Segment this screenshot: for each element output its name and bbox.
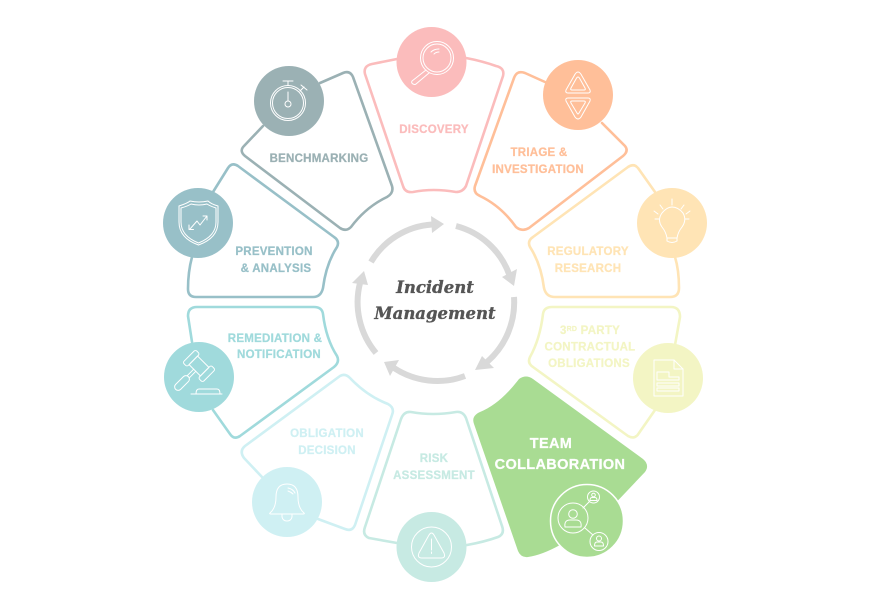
label: third party contractual obligations: CONTRACTUAL xyxy=(545,342,635,354)
label: risk assessment: ASSESSMENT xyxy=(393,470,475,482)
label: benchmarking: BENCHMARKING xyxy=(270,153,368,165)
label: third party contractual obligations: 3 xyxy=(560,325,567,337)
label: triage and investigation: INVESTIGATION xyxy=(492,164,584,176)
label: risk assessment: RISK xyxy=(420,453,449,465)
label: team collaboration: TEAM xyxy=(530,436,572,452)
label: obligation decision: DECISION xyxy=(298,445,356,457)
label: remediation and notification: REMEDIATION & xyxy=(228,333,322,345)
panel: triage and investigation xyxy=(475,60,627,230)
icon: shield with chart xyxy=(163,188,233,258)
icon: warning triangle xyxy=(396,512,466,582)
icon: light bulb xyxy=(637,188,707,258)
label: triage and investigation: TRIAGE & xyxy=(511,147,567,159)
icon: gavel xyxy=(164,342,234,412)
label: team collaboration: COLLABORATION xyxy=(495,457,625,473)
icon: triage triangles xyxy=(543,60,613,130)
label: remediation and notification: NOTIFICATION xyxy=(237,349,321,361)
icon: connected people xyxy=(550,484,624,558)
center title: Management xyxy=(373,304,496,323)
label: regulatory research: REGULATORY xyxy=(547,246,629,258)
panel: obligation decision xyxy=(242,375,393,537)
icon: document xyxy=(633,343,703,413)
panel: regulatory research xyxy=(529,165,707,297)
label: prevention and analysis: PREVENTION xyxy=(235,246,313,258)
icon: stopwatch xyxy=(254,66,324,136)
label: regulatory research: RESEARCH xyxy=(555,263,621,275)
center title: Incident xyxy=(395,278,474,297)
label: third party contractual obligations: RD xyxy=(567,326,577,333)
panel: risk assessment xyxy=(364,412,503,582)
panel: third party contractual obligations xyxy=(529,307,703,437)
label: third party contractual obligations: OBLIGATIONS xyxy=(548,358,630,370)
panel: remediation and notification xyxy=(164,307,338,438)
label: prevention and analysis: & ANALYSIS xyxy=(241,263,311,275)
center cycle arrows xyxy=(352,216,517,381)
panel: prevention and analysis xyxy=(163,164,338,297)
panel: team collaboration (highlighted) xyxy=(473,376,647,558)
icon: bell xyxy=(252,467,322,537)
label: third party contractual obligations: PARTY xyxy=(577,325,620,337)
icon: discovery magnifier xyxy=(396,27,466,97)
panel: benchmarking xyxy=(242,66,392,230)
label: obligation decision: OBLIGATION xyxy=(290,428,364,440)
label: discovery: DISCOVERY xyxy=(399,124,469,136)
panel: discovery xyxy=(365,27,503,192)
